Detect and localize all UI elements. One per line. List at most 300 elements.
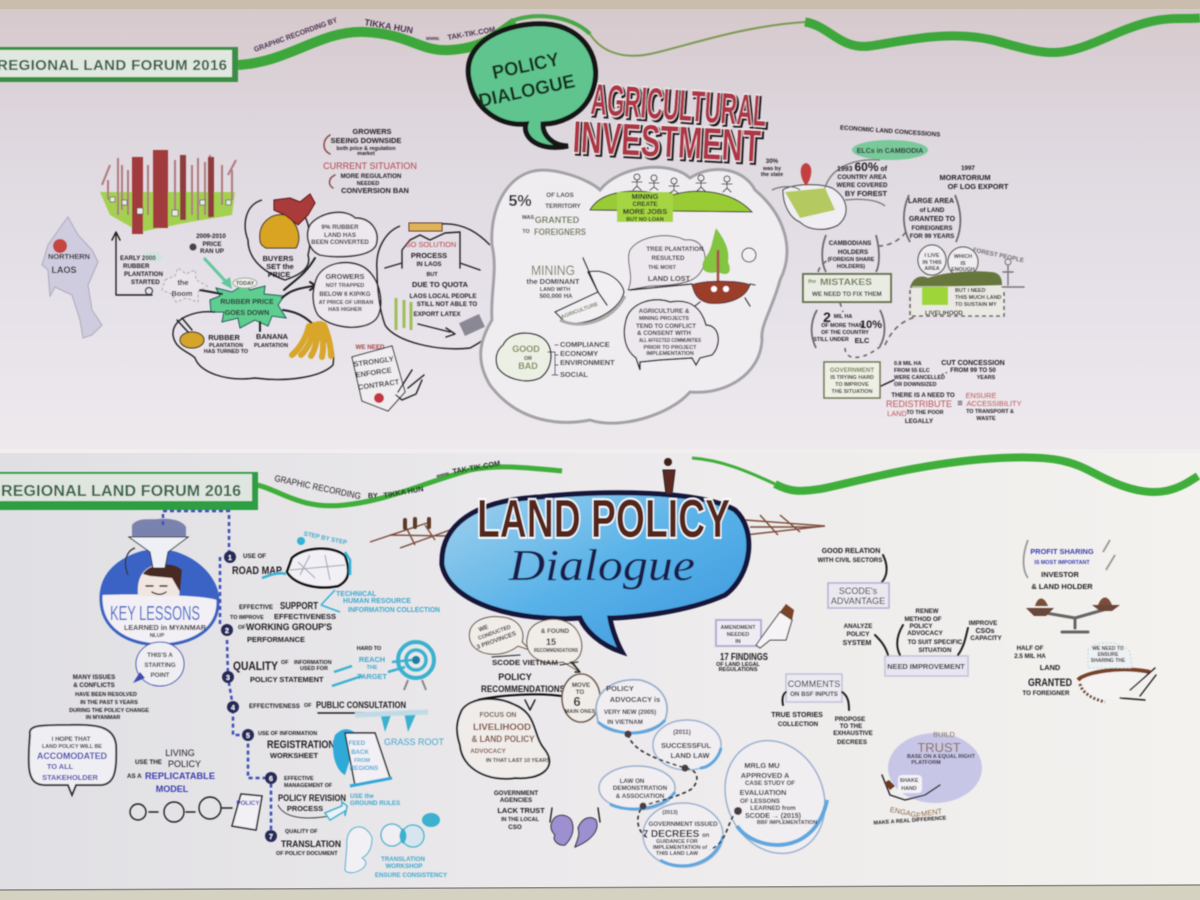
17 findings: REGULATIONS (719, 667, 758, 673)
rubber price goes down burst: GOES DOWN (225, 310, 269, 317)
model progression icons (130, 794, 262, 830)
good relation note: GOOD RELATION (822, 548, 880, 555)
green hill and mining jobs: CREATE (633, 201, 657, 208)
cloud: growers not trapped: GROWERS (325, 272, 365, 281)
step 6 policy revision (278, 776, 400, 820)
step markers (221, 551, 277, 842)
step 6 policy revision: MANAGEMENT OF (284, 783, 333, 789)
redistribute land: WASTE (976, 416, 996, 422)
title: agricultural investment: AGRICULTURAL (589, 75, 768, 136)
cloud: good or bad: BAD (518, 361, 538, 371)
cloud: consulted 3 provinces: 3 PROVINCES (476, 630, 517, 651)
scode vietnam (492, 655, 578, 667)
large area of land granted: of LAND (920, 207, 945, 214)
cloud: solution process in laos: IN LAOS (416, 261, 442, 268)
true stories and propose notes: TO THE (840, 723, 862, 730)
dashed connectors between circles (628, 734, 738, 850)
cloud: solution process in laos: LAOS LOCAL PEOPLE (410, 293, 476, 300)
cloud: focus on livelihood: LIVELIHOOD (473, 722, 532, 732)
current situation notes: CONVERSION BAN (341, 186, 409, 195)
starting point bubble: THIS'S A (147, 652, 173, 659)
cloud: found recommendations: & FOUND (541, 628, 570, 635)
cambodians holders: CAMBODIANS (829, 240, 871, 247)
build trust engagement: MENT (921, 807, 943, 818)
mistakes box: the (808, 279, 816, 285)
circle: mrlg mou evaluation: LEARNED from (750, 805, 796, 812)
step 4 public consultation (249, 700, 428, 732)
amendment needed box: AMENDMENT (720, 625, 756, 631)
forest people scene: BUT I NEED (955, 288, 986, 294)
1997 moratorium: OF LOG EXPORT (948, 182, 1009, 191)
cancelled concessions: FROM 99 TO 50 (950, 367, 996, 374)
cloud: agriculture and mining conflict (624, 300, 718, 370)
price ran up label and arrow: 2009-2010 (196, 233, 226, 240)
cloud: growers not trapped: NOT TRAPPED (326, 283, 364, 289)
2 million hectares elc: STILL UNDER (813, 337, 849, 343)
circle: government decrees: GUIDANCE FOR (656, 839, 698, 845)
step 3 quality: OF (281, 660, 289, 666)
translation workshop icon: TRANSLATION (381, 856, 425, 863)
living policy replicatable model: MODEL (156, 784, 189, 794)
2 million hectares elc: OF MORE THAN (821, 323, 863, 329)
bottom banner: REGIONAL LAND FORUM 2016 (1, 483, 241, 500)
step 2 effective support: PERFORMANCE (247, 635, 305, 644)
redistribute land: TO THE POOR (906, 410, 944, 416)
cake land cut icon: WE NEED TO (1092, 646, 1124, 652)
half of land granted: HALF OF (1017, 645, 1044, 652)
contract note: WE NEED (356, 344, 385, 351)
numbered timeline path (163, 511, 271, 836)
good relation note: WITH CIVIL SECTORS (818, 557, 882, 564)
circle: mrlg mou evaluation: EVALUATION (740, 788, 786, 797)
circle: move to 6 main ones: MAIN ONES (565, 709, 596, 715)
current situation notes: GROWERS (352, 127, 392, 136)
title: agricultural investment (571, 75, 770, 174)
step 2 effective support: EFFECTIVENESS (274, 612, 336, 621)
living policy replicatable model: USE THE (135, 759, 162, 766)
redistribute land (886, 391, 1022, 425)
cloud: solution process in laos: EXPORT LATEX (414, 311, 461, 318)
circle: law on demonstration: & ASSOCIATION (616, 793, 665, 800)
policy recommendations: POLICY (498, 672, 532, 682)
price ran up label and arrow (190, 233, 232, 289)
circle: mrlg mou evaluation: OF LESSONS (740, 798, 780, 805)
scode's advantage box: SCODE's (839, 586, 878, 596)
forest people scene: LIVELIHOOD (925, 310, 963, 317)
circle: mrlg mou evaluation: MRLG MU (744, 761, 780, 770)
cloud: focus on livelihood: ADVOCACY (470, 748, 507, 755)
circle: government decrees: 7 DECREES on (643, 829, 710, 840)
northern laos map: LAOS (51, 265, 77, 275)
government box (824, 362, 894, 398)
graphic recording credit bottom (274, 459, 501, 501)
need improvement group: IMPROVE (969, 620, 997, 627)
grass root: GRASS ROOT (384, 737, 445, 747)
cambodians holders: HOLDERS (838, 249, 868, 256)
cloud: agriculture and mining conflict: MINING PROJECTS (639, 316, 689, 322)
5 percent statement: TERRITORY (545, 203, 582, 210)
forest people scene: THIS MUCH LAND (955, 295, 1002, 301)
comments on bsf box: COMMENTS (788, 679, 840, 689)
need improvement group: ADVOCACY (907, 630, 944, 637)
forest people scene: ENOUGH (951, 267, 975, 273)
green hill and mining jobs (590, 174, 752, 223)
need improvement group: POLICY (909, 623, 933, 630)
comments on bsf box: ON BSF INPUTS (790, 691, 838, 698)
circle: mrlg mou evaluation: APPROVED A (741, 771, 790, 780)
step markers: 7 (269, 834, 273, 841)
top ribbon arch behind bubble (510, 16, 590, 34)
mining dominant pie: MINING (531, 262, 575, 278)
connector nodes (624, 730, 742, 815)
17 findings (716, 652, 768, 673)
forest people scene: IN THIS (922, 260, 942, 266)
step 7 translation: TRANSLATION (281, 839, 341, 849)
cloud: rubber to banana: HAS TURNED TO (204, 349, 248, 355)
redistribute land: TO TRANSPORT & (966, 409, 1014, 415)
top green ribbon left (238, 22, 515, 65)
cake land cut icon (1078, 643, 1156, 702)
cloud: buyers set the price: BUYERS (263, 254, 293, 263)
lack trust note: AGENCIES (500, 797, 532, 804)
half of land granted: LAND (1040, 663, 1061, 672)
field left (370, 522, 450, 548)
cloud: good or bad: ECONOMY (560, 349, 598, 358)
elc in cambodia header (840, 125, 940, 160)
forest people scene: AREA (924, 266, 940, 272)
step 2 effective support: WORKING GROUP'S (246, 622, 332, 632)
lack trust note: IN THE LOCAL (501, 817, 540, 823)
circle: policy advocacy: IN VIETNAM (607, 719, 643, 726)
policy dialogue speech bubble: DIALOGUE (477, 71, 577, 112)
cloud: buyers set the price: SET the (266, 262, 294, 271)
need improvement group: NEED IMPROVEMENT (887, 662, 965, 671)
1997 moratorium: 1997 (961, 165, 975, 172)
lack trust note: CSO (508, 824, 522, 831)
circle: government decrees (643, 803, 723, 867)
many issues note: DURING THE POLICY CHANGE (69, 708, 149, 714)
step 4 public consultation: EFFECTIVENESS (249, 703, 300, 710)
accommodated speech bubble: I HOPE THAT (52, 736, 91, 743)
build trust engagement: MAKE A REAL DIFFERENCE (873, 815, 947, 827)
many issues note: & CONFLICTS (73, 682, 115, 689)
step 1 road map: ROAD MAP (232, 565, 282, 577)
need improvement group: ANALYZE (844, 623, 872, 630)
step 6 policy revision: EFFECTIVE (284, 776, 314, 782)
broken heart icon (550, 808, 600, 847)
2 million hectares elc: 2 (823, 309, 831, 325)
contract note: ENFORCE (355, 366, 392, 379)
circle: successful land law: (2011) (673, 729, 691, 736)
tree on angry land (630, 228, 756, 306)
cloud: agriculture and mining conflict: IMPLEMENTATION (646, 351, 694, 357)
cloud: focus on livelihood: & LAND POLICY (472, 734, 534, 744)
bottom banner (0, 472, 258, 510)
step 3 quality: QUALITY (233, 659, 278, 673)
step markers: 3 (226, 675, 230, 682)
land policy dialogue bubble: Dialogue (508, 541, 695, 590)
redistribute land: ACCESSIBILITY (966, 399, 1022, 408)
green hill and mining jobs: MINING (632, 192, 659, 201)
government box: THE SITUATION (832, 389, 873, 395)
5 percent statement (508, 192, 586, 237)
large area of land granted: LARGE AREA (908, 198, 954, 205)
cancelled concessions: 0.8 MIL HA (894, 361, 922, 367)
circle: mrlg mou evaluation: SCODE → (2015) (745, 813, 801, 820)
top green ribbon right (805, 18, 1200, 53)
need improvement group (843, 608, 1002, 676)
scode's advantage box: ADVANTAGE (831, 596, 885, 606)
profit sharing and scales: IS MOST IMPORTANT (1034, 560, 1090, 566)
cloud: rubber land converted: LAND HAS (324, 232, 356, 239)
lack trust note: GOVERNMENT (494, 790, 538, 797)
feedback worksheet icon: REGIONS (350, 765, 378, 772)
cloud: solution process in laos: SO SOLUTION (406, 240, 456, 249)
step 7 translation (276, 829, 341, 857)
circle: mrlg mou evaluation (707, 724, 843, 870)
profit sharing and scales (1024, 540, 1120, 632)
graphic recording credit top (253, 15, 496, 54)
mining dominant pie: the DOMINANT (527, 277, 580, 286)
true stories and propose notes: COLLECTION (778, 721, 819, 728)
forest people scene: IS (960, 261, 966, 267)
accommodated speech bubble: LAND POLICY WILL BE (42, 744, 102, 750)
accommodated speech bubble: TO ALL (47, 762, 74, 771)
step 2 effective support: TECHNICAL (336, 591, 377, 598)
cloud: solution process in laos: BUT (426, 272, 438, 278)
starting point bubble: STARTING (144, 662, 176, 669)
cancelled concessions (894, 360, 1005, 388)
half of land granted (1014, 645, 1072, 697)
cloud: growers not trapped: AT PRICE OF URBAN (319, 300, 373, 306)
cloud: good or bad: COMPLIANCE (560, 340, 610, 349)
current situation notes: CURRENT SITUATION (323, 161, 417, 171)
forest people scene: WHICH (954, 254, 972, 260)
step markers: 1 (228, 555, 232, 562)
2 million hectares elc: MIL HA (834, 314, 852, 320)
government box: GOVERNMENT (830, 367, 874, 374)
mining dominant pie (527, 258, 625, 324)
2 million hectares elc (812, 303, 884, 357)
circle: law on demonstration: LAW ON (620, 778, 645, 785)
rubber plantation chart: STARTED (131, 279, 160, 286)
build trust engagement: BASE ON A EQUAL RIGHT (907, 754, 976, 760)
amendment needed box: IN (735, 639, 741, 645)
lack trust note (494, 790, 545, 831)
2 million hectares elc: 10% (860, 319, 882, 331)
true stories and propose notes: TRUE STORIES (771, 712, 823, 719)
step 6 policy revision: USE the (350, 793, 374, 800)
graphic recording credit top: www. (425, 36, 440, 42)
large area of land granted: FOREIGNERS (912, 225, 952, 232)
cloud: growers not trapped: HAS HIGHER (328, 307, 362, 313)
circle: successful land law (653, 720, 721, 770)
many issues note: HAVE BEEN RESOLVED (75, 692, 137, 698)
cloud: buyers set the price: PRICE (268, 270, 290, 279)
true stories and propose notes: EXHAUSTIVE (833, 730, 873, 737)
5 percent statement: 5% (508, 193, 532, 210)
government box: TO IMPROVE (835, 382, 869, 388)
rubber plantation chart: EARLY 2000 (120, 255, 156, 262)
graphic recording credit bottom: www. (435, 470, 451, 480)
bottom banner ribbon left (257, 467, 562, 506)
translation workshop icon (345, 813, 448, 879)
cloud: agriculture and mining conflict: & CONSENT WITH (637, 330, 692, 337)
many issues note: MANY ISSUES (73, 674, 115, 681)
step 7 translation: QUALITY OF (285, 829, 318, 835)
graphic recording credit top: TIKKA HUN (364, 17, 414, 36)
step markers: 4 (231, 705, 235, 712)
government box: IS TRYING HARD (830, 375, 874, 381)
rubber price goes down burst (210, 278, 286, 328)
step 2 effective support (230, 590, 440, 644)
key lessons panel: KEY LESSONS (110, 603, 200, 625)
cloud: agriculture and mining conflict: AGRICULTURE & (639, 308, 690, 315)
many issues note: IN THE PAST 5 YEARS (80, 700, 138, 706)
current situation notes: market (357, 151, 375, 157)
policy recommendations (478, 672, 568, 700)
step 5 registration worksheet (258, 731, 335, 760)
current situation notes: both price & regulation (336, 146, 396, 152)
need improvement group: RENEW (915, 608, 939, 615)
the boom burst: the (177, 278, 189, 287)
circle: successful land law: LAND LAW (670, 751, 710, 760)
large area of land granted: GRANTED TO (909, 216, 956, 223)
northern laos map: NORTHERN (48, 252, 90, 261)
cloud: tree plantation: RESULTED (652, 255, 685, 262)
step 3 quality (233, 646, 387, 684)
build trust engagement: SHAKE (900, 778, 919, 784)
step 1 road map: USE OF (243, 553, 266, 560)
cambodians holders: HOLDERS) (837, 264, 865, 270)
5 percent statement: GRANTED (535, 215, 580, 225)
step 2 effective support: SUPPORT (280, 601, 318, 612)
need improvement group: CSOs (975, 628, 995, 635)
good relation note (818, 548, 887, 582)
title: agricultural investment: INVESTMENT (573, 113, 764, 174)
step markers: 5 (246, 733, 250, 740)
need improvement group: SYSTEM (843, 640, 872, 647)
forest cover illustration: 30% (766, 158, 779, 165)
elc in cambodia header: ELCs in CAMBODIA (857, 148, 923, 155)
cloud: rubber land converted: BEEN CONVERTED (311, 239, 369, 246)
half of land granted: TO FOREIGNER (1023, 690, 1070, 697)
cake land cut icon: SHARING THE (1091, 658, 1126, 664)
field right (745, 515, 825, 535)
forest cover illustration: was by (762, 166, 781, 172)
cloud: tree plantation (628, 236, 705, 290)
need improvement group: CAPACITY (970, 635, 1002, 642)
mining dominant pie: LAND WITH (540, 287, 570, 293)
step 6 policy revision: GROUND RULES (350, 800, 400, 807)
cloud: focus on livelihood: IN THAT LAST 10 YEARS (486, 758, 550, 764)
contract note: CONTRACT (357, 377, 400, 392)
living policy replicatable model: AS A (127, 773, 142, 780)
feedback worksheet icon (333, 729, 392, 786)
cancelled concessions: CUT CONCESSION (941, 360, 1005, 367)
redistribute land: ENSURE (966, 391, 996, 400)
contract note: STRONGLY (353, 354, 394, 369)
bottom ribbon thick right (775, 457, 1198, 492)
living policy replicatable model: POLICY (168, 759, 201, 769)
circle: government decrees: IMPLEMENTATION of (653, 845, 707, 851)
cloud: tree plantation: TREE PLANTATION (646, 246, 704, 253)
key lessons panel: LEARNED in MYANMAR (124, 623, 207, 632)
lack trust note: LACK TRUST (497, 806, 545, 815)
circle: mrlg mou evaluation: CASE STUDY OF (745, 780, 795, 787)
redistribute land: REDISTRIBUTE (886, 399, 952, 409)
graphic recording credit bottom: TAK-TIK.COM (452, 459, 501, 476)
cake land cut icon: ENSURE (1098, 652, 1119, 658)
circle: mrlg mou evaluation: BBF IMPLEMENTATION (757, 820, 817, 826)
pointing hand (756, 604, 794, 648)
cloud: found recommendations: RECOMMENDATIONS (534, 648, 578, 654)
circle: move to 6 main ones: TO (576, 689, 584, 696)
cloud: found recommendations: 15 (546, 637, 556, 647)
accommodated speech bubble: ACCOMODATED (37, 751, 107, 761)
cloud: consulted 3 provinces: CONDUCTED (477, 624, 512, 642)
step 2 effective support: HUMAN RESOURCE (343, 598, 411, 605)
step 3 quality: POLICY STATEMENT (250, 675, 324, 684)
cloud: focus on livelihood: FOCUS ON (480, 712, 516, 719)
cloud: found recommendations (527, 619, 582, 672)
forest people scene: TO SUSTAIN MY (955, 302, 997, 308)
cloud: good or bad (496, 333, 615, 381)
circle: successful land law: SUCCESSFUL (661, 741, 712, 750)
build trust engagement: BUILD (933, 730, 955, 739)
current situation notes: NEEDED (357, 181, 379, 187)
circle: government decrees: THIS LAND LAW (656, 851, 699, 857)
build trust engagement: PLATFORM (911, 760, 941, 766)
translation workshop icon: WORKSHOP (385, 863, 423, 870)
cloud: rubber land converted: 9% RUBBER (321, 224, 359, 231)
mistakes box: MISTAKES (820, 277, 872, 287)
circle: policy advocacy (596, 680, 667, 733)
forest cover illustration (761, 158, 885, 229)
amendment needed box: NEEDED (727, 632, 749, 638)
cloud: good or bad: OR (524, 356, 532, 362)
the boom burst: Boom (172, 289, 193, 298)
circle: policy advocacy: VERY NEW (2005) (604, 709, 656, 716)
price ran up label and arrow: RAN UP (200, 248, 224, 255)
many issues note (69, 674, 149, 721)
cloud: agriculture and mining conflict: ALL AFFECTED COMMUNITIES (639, 338, 701, 344)
step 4 public consultation: OF (304, 703, 312, 709)
key lessons panel (101, 550, 218, 645)
circle: policy advocacy: POLICY (606, 684, 634, 693)
policy dialogue speech bubble (468, 24, 596, 147)
cambodians holders (818, 232, 906, 272)
circle: government decrees: (2013) (662, 810, 678, 816)
true stories and propose notes: PROPOSE (835, 716, 865, 723)
many issues note: IN MYANMAR (86, 715, 120, 721)
step 1 road map: STEP BY STEP (303, 531, 348, 547)
circle: policy advocacy: ADVOCACY is (610, 695, 660, 704)
green hill and mining jobs: BUT NO LOAN (626, 217, 664, 223)
mining dominant pie: 500,000 HA (539, 293, 573, 300)
cloud: rubber land converted (308, 212, 377, 257)
step 3 quality: INFORMATION (294, 660, 332, 666)
large area of land granted: FOR 99 YEARS (910, 233, 954, 240)
cloud: rubber to banana (173, 312, 334, 379)
cloud: tree plantation: LAND LOST (648, 274, 691, 283)
step 2 effective support: TO IMPROVE (230, 615, 264, 621)
cloud: focus on livelihood (457, 699, 550, 779)
cloud: solution process in laos: PROCESS (411, 251, 447, 260)
need improvement group: SITUATION (919, 647, 952, 654)
cloud: rubber to banana: PLANTATION (254, 343, 288, 349)
cloud: agriculture and mining conflict: TEND TO CONFLICT (636, 323, 696, 330)
